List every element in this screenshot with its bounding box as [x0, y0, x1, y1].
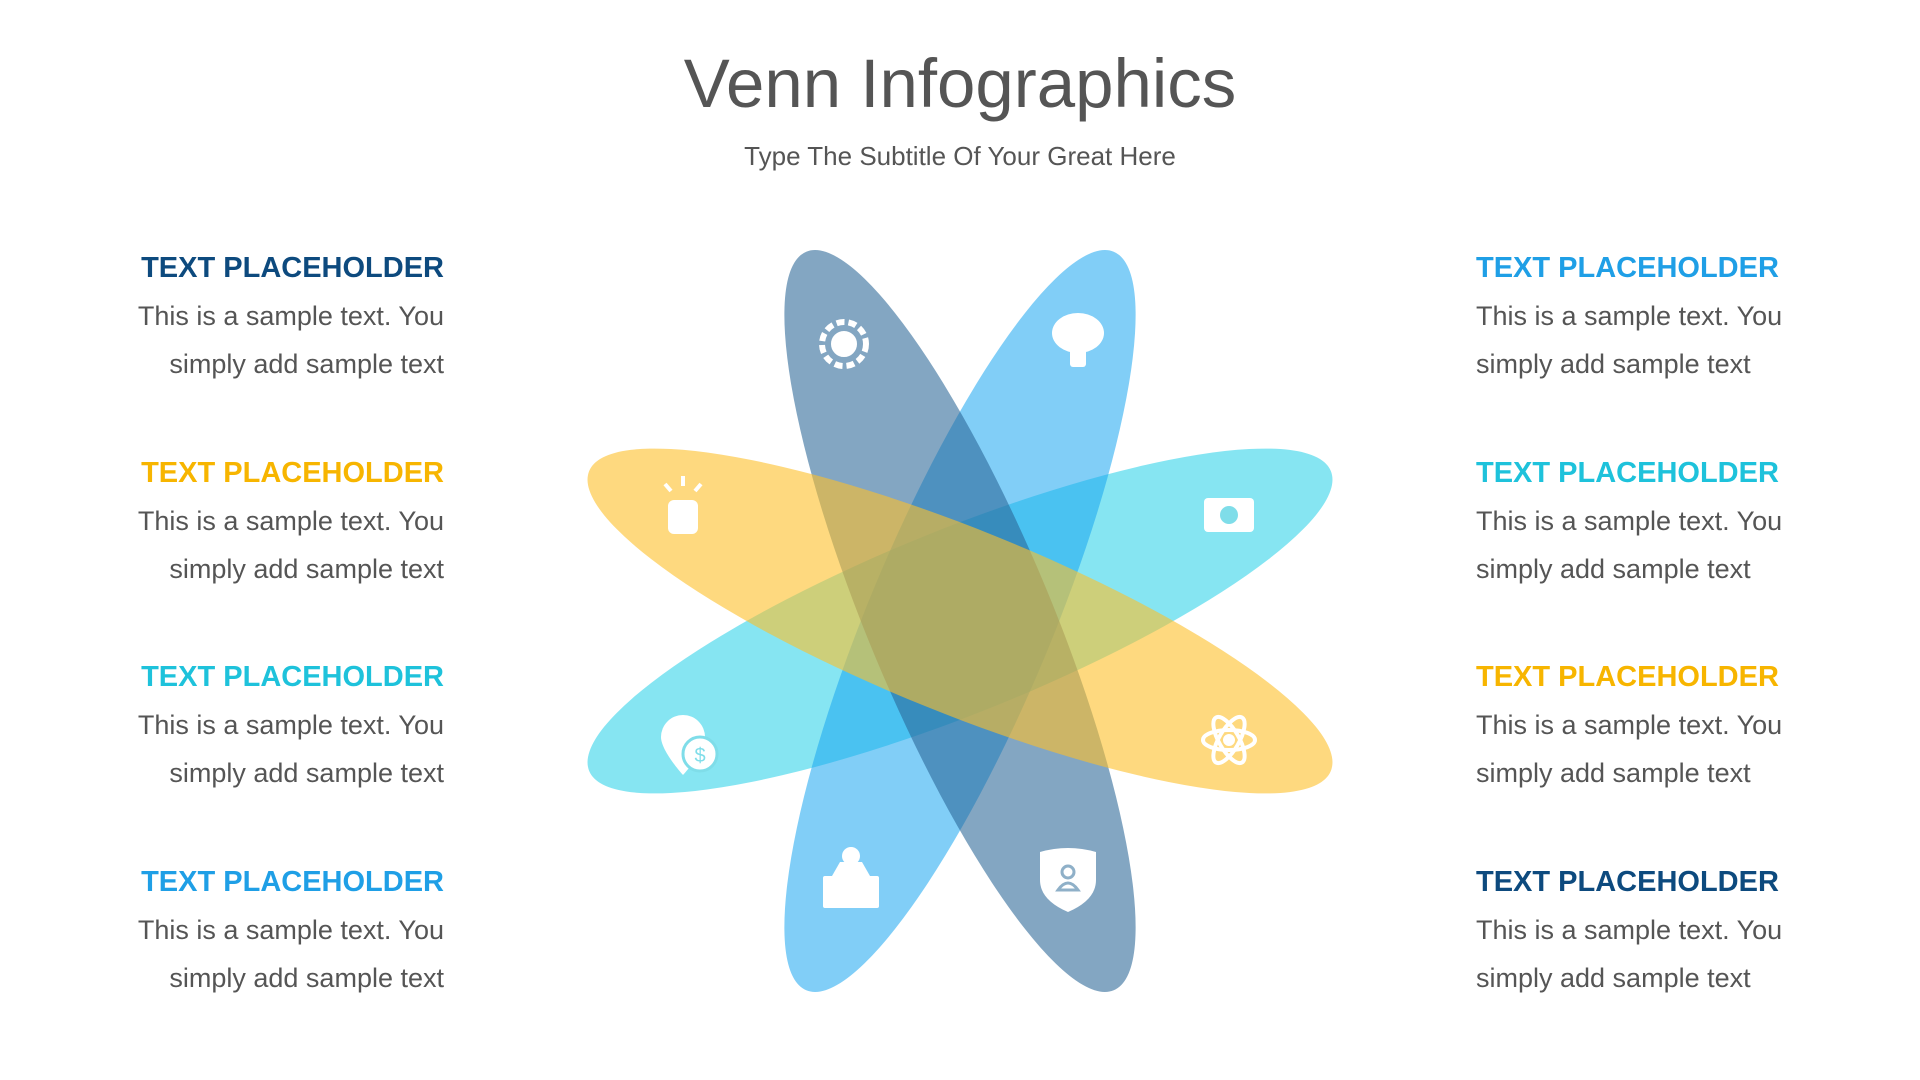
icon: atom — [1203, 712, 1255, 768]
text block: right 4: This is a sample text. You — [1476, 915, 1782, 945]
text block: left 1: TEXT PLACEHOLDER — [141, 252, 444, 284]
ellipse: yellow — [555, 386, 1365, 856]
text block: left 3: simply add sample text — [169, 758, 444, 788]
ellipse: cyan — [555, 386, 1365, 856]
text block: right 3 — [1476, 661, 1782, 788]
icon: brain — [1052, 313, 1104, 367]
text block: right 3: This is a sample text. You — [1476, 710, 1782, 740]
text block: right 3: simply add sample text — [1476, 758, 1751, 788]
text block: right 2: TEXT PLACEHOLDER — [1476, 457, 1779, 489]
text block: left 2: TEXT PLACEHOLDER — [141, 457, 444, 489]
text block: left 1: This is a sample text. You — [138, 301, 444, 331]
text block: left 4: simply add sample text — [169, 963, 444, 993]
text block: right 2: simply add sample text — [1476, 554, 1751, 584]
text block: right 3: TEXT PLACEHOLDER — [1476, 661, 1779, 693]
text block: left 2: simply add sample text — [169, 554, 444, 584]
text block: right 2 — [1476, 457, 1782, 584]
text block: right 4: simply add sample text — [1476, 963, 1751, 993]
ellipse: light blue — [721, 216, 1199, 1026]
text block: left 2: This is a sample text. You — [138, 506, 444, 536]
text block: left 3 — [138, 661, 444, 788]
text block: right 1 — [1476, 252, 1782, 379]
text block: right 1: TEXT PLACEHOLDER — [1476, 252, 1779, 284]
text block: right 2: This is a sample text. You — [1476, 506, 1782, 536]
text block: left 4 — [138, 866, 444, 993]
subtitle: Type The Subtitle Of Your Great Here — [744, 141, 1176, 171]
title: Venn Infographics — [684, 45, 1236, 122]
text block: left 3: TEXT PLACEHOLDER — [141, 661, 444, 693]
text block: left 4: TEXT PLACEHOLDER — [141, 866, 444, 898]
text block: left 3: This is a sample text. You — [138, 710, 444, 740]
text block: right 1: This is a sample text. You — [1476, 301, 1782, 331]
icon: shield — [1040, 848, 1096, 912]
text block: right 4 — [1476, 866, 1782, 993]
text block: right 4: TEXT PLACEHOLDER — [1476, 866, 1779, 898]
icon: people — [823, 847, 879, 908]
text block: left 1 — [138, 252, 444, 379]
icon: pin dollar: $ — [694, 745, 706, 767]
icon: hand — [665, 476, 701, 534]
text block: left 1: simply add sample text — [169, 349, 444, 379]
text block: left 4: This is a sample text. You — [138, 915, 444, 945]
icon: camera — [1204, 498, 1254, 532]
icon: gear — [822, 322, 866, 366]
ellipse: dark blue — [721, 216, 1199, 1026]
icon: pin dollar — [661, 715, 717, 775]
text block: right 1: simply add sample text — [1476, 349, 1751, 379]
text block: left 2 — [138, 457, 444, 584]
